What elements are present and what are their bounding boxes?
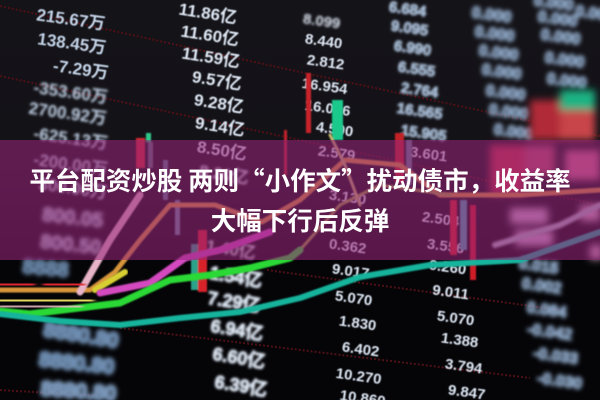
ticker column: amounts in yi: 7.29亿 [206,288,262,316]
ticker column: values right of centre: 16.565 [396,100,444,123]
ticker column: amounts in wan: 800.05 [41,204,104,232]
title: 大幅下行后反弹 [211,201,389,238]
ticker column: values right of centre [388,0,486,400]
ticker column: amounts in wan: -7.29万 [52,56,110,83]
ticker column: amounts in wan: -625.13万 [32,124,109,153]
ticker column: values centre: 9.017 [331,261,370,283]
ticker column: values right of centre: 3.601 [409,144,448,166]
ticker column: values right of centre: 2.504 [421,209,461,231]
ticker column: values right of centre: 9.011 [431,282,470,304]
ticker column: values centre: 0.362 [328,236,367,258]
ticker column: values centre: 8.099 [302,11,341,33]
ticker column: values centre: 16.954 [301,75,349,98]
ticker column: blurred values right: 0.000 [544,49,586,72]
ticker column: values right of centre: 3.556 [426,236,465,258]
ticker column: values right of centre: 3.794 [444,356,484,378]
ticker column: amounts in wan: 138.45万 [36,29,107,58]
ticker column: amounts in yi: 11.60亿 [179,22,240,50]
ticker column: blurred values right: 0.000 [488,101,530,124]
title: 平台配资炒股 两则“小作文”扰动债市，收益率 [29,161,571,198]
ticker column: values right of centre: 2.764 [400,80,440,102]
ticker column: blurred values right: -0.030 [536,370,583,393]
ticker column: blurred values right: 0.000 [546,70,588,93]
ticker column: amounts in wan: 800.50 [39,231,102,259]
ticker column: values right of centre: 6.990 [393,38,432,60]
ticker column: values centre [301,11,387,400]
ticker column: values centre: 5.070 [334,288,373,310]
ticker column: amounts in wan: -200.00万 [32,150,109,179]
ticker column: blurred values right: 0.000 [493,121,535,144]
ticker column: amounts in wan: 8888 [21,255,70,282]
ticker column: blurred values right: 0.015 [518,255,560,278]
ticker column: amounts in wan: 8880.80 [42,318,120,353]
ticker column: amounts in yi: 8.50亿 [196,137,248,164]
ticker column: amounts in yi: 8.20亿 [198,161,250,188]
ticker column: values centre: 8.440 [304,31,343,53]
magenta translucent title band [0,140,600,260]
chart lines [0,135,600,325]
ticker column: amounts in wan [21,5,120,400]
ticker column: values centre: 6.402 [341,339,380,361]
ticker column: amounts in yi: 6.39亿 [213,372,269,400]
ticker column: amounts in yi: 9.57亿 [191,67,243,94]
ticker column: amounts in yi: 6.94亿 [209,316,265,344]
ticker column: values right of centre: 15.905 [400,122,448,145]
ticker column: amounts in wan: 2700.92万 [28,99,108,128]
ticker column: values right of centre: 6.555 [397,59,436,81]
ticker column: amounts in wan: 8880.80 [38,348,116,379]
ticker column: blurred values right: 0.000 [481,61,523,84]
title [29,161,571,238]
ticker column: blurred values right: -0.042 [526,321,573,344]
ticker column: values right of centre: 1.388 [440,330,479,352]
ticker column: blurred values right: 0.084 [526,299,568,322]
ticker column: values centre: 4.500 [315,119,354,141]
ticker column: amounts in yi: 1.40亿 [205,236,257,263]
ticker column: values centre: 16.026 [304,97,352,120]
ticker column: values right of centre: 9.095 [390,18,429,40]
ticker column: amounts in yi: 9.14亿 [194,113,246,140]
ticker column: blurred values right: 0.000 [471,4,513,27]
ticker column: values right of centre: 0.260 [428,257,467,279]
ticker column: amounts in yi: 11.86亿 [177,0,238,28]
ticker column: blurred values right: 0.000 [478,42,520,65]
ticker column: values centre: 2.812 [306,52,345,74]
ticker column: values centre: 3.130 [328,187,367,209]
candlesticks [136,73,476,292]
rainbow bundle at left edge [0,284,80,285]
ticker column: blurred values right: 0.000 [485,82,527,105]
ticker column: blurred values right: 0.000 [540,26,582,49]
ticker column: blurred values right: 0.000 [537,8,579,31]
ticker column: amounts in yi [177,0,269,400]
ticker column: amounts in wan: 300.00万 [37,174,108,203]
ticker column: amounts in wan: -353.60万 [32,78,109,107]
ticker column: values centre: 1.830 [338,313,377,335]
ticker column: amounts in yi: 11.59亿 [180,44,241,72]
ticker column: blurred values right [471,0,600,393]
ticker column: values centre: 10.270 [335,365,383,388]
ticker column: values right of centre: 5.070 [436,308,475,330]
ticker column: amounts in yi: 1.54亿 [208,263,264,291]
ticker column: amounts in yi: 6.60亿 [211,344,267,372]
ticker column: blurred values right: 0.002 [521,275,563,298]
blurred coloured blobs, upper right [490,90,600,259]
ticker column: blurred values right: 0.000 [474,23,516,46]
ticker column: values centre: 2.579 [317,143,356,165]
ticker column: amounts in wan: 215.67万 [35,5,106,34]
ticker column: blurred values right: -0.033 [532,345,579,368]
ticker column: amounts in yi: 9.28亿 [193,90,245,117]
